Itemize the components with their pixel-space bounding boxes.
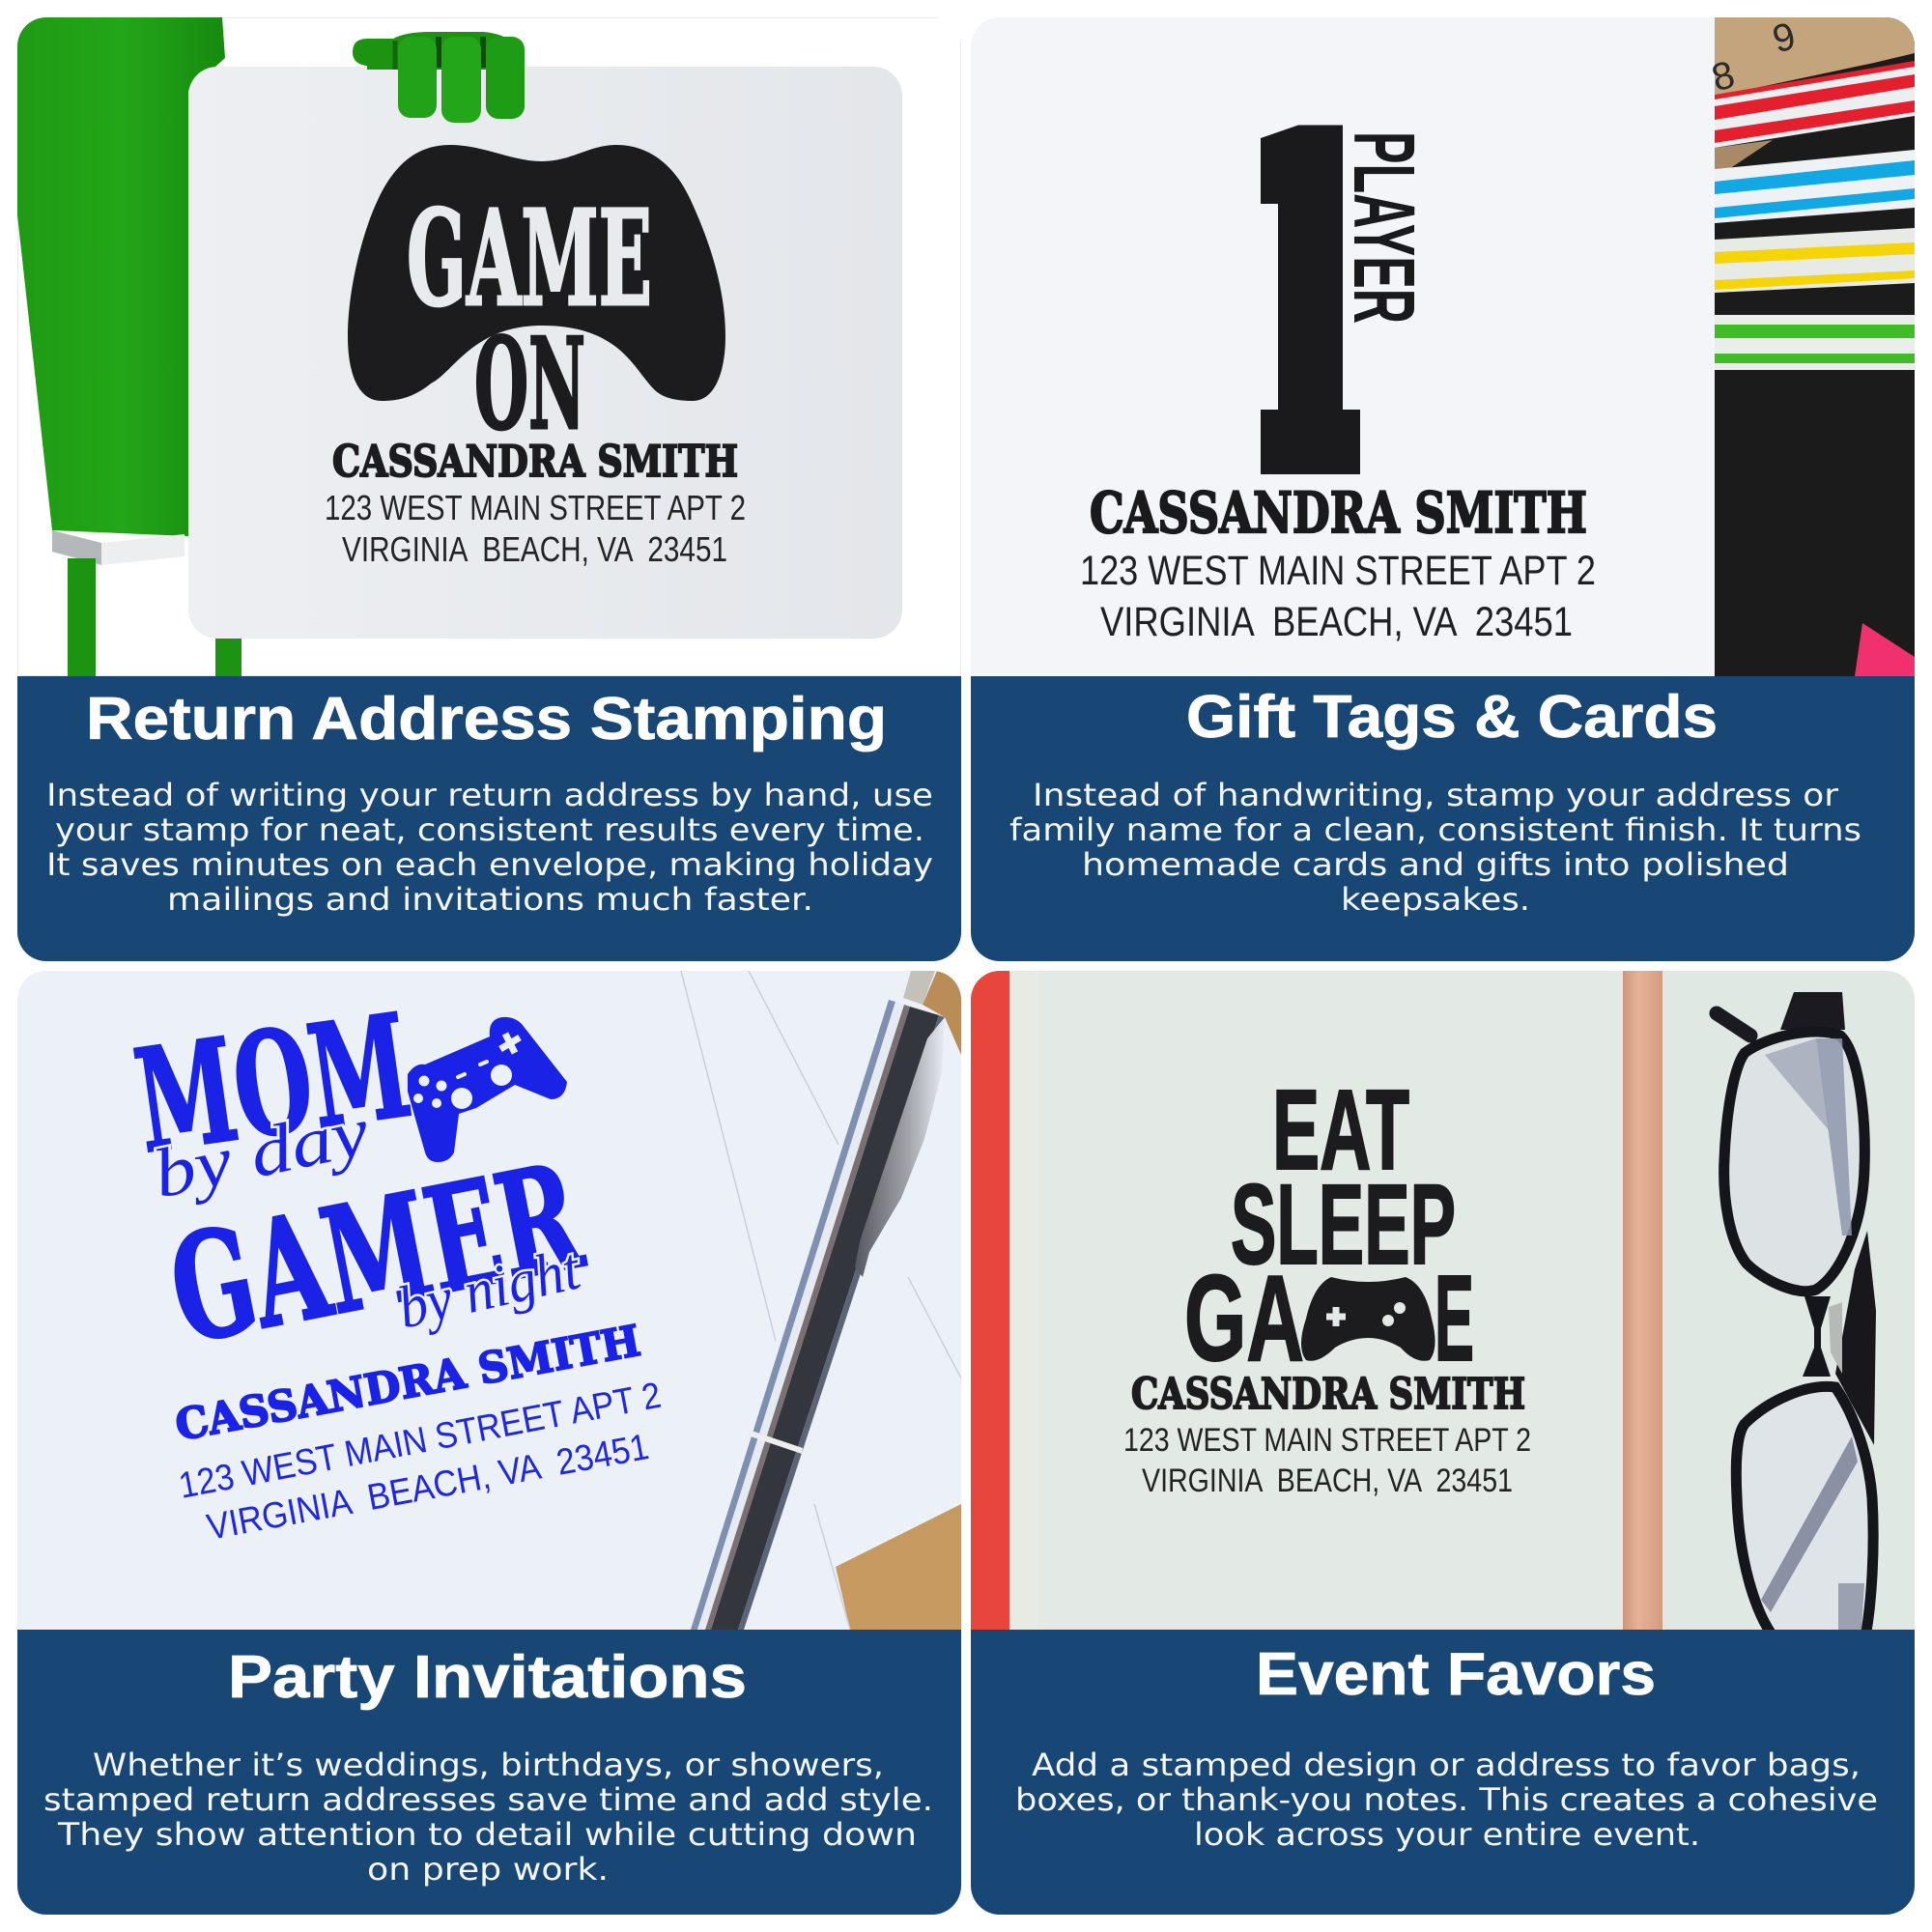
by day script: by day — [147, 1093, 375, 1213]
body text: Whether it’s weddings, birthdays, or showers, — [93, 1747, 884, 1783]
heading: Gift Tags & Cards — [1186, 684, 1718, 751]
body text — [46, 777, 933, 918]
number one graphic — [1261, 126, 1360, 474]
panel: party invitations — [17, 971, 961, 1915]
desk strip with ruler and tapes: 8 — [1707, 53, 1739, 99]
SLEEP text: SLEEP — [1231, 1161, 1456, 1289]
body text: stamped return addresses save time and add style. — [43, 1781, 933, 1818]
name: CASSANDRA SMITH — [1131, 1370, 1525, 1419]
game pad icon — [408, 1017, 567, 1162]
body text: homemade cards and gifts into polished — [1082, 846, 1789, 883]
body text: your stamp for neat, consistent results every time. — [55, 811, 924, 848]
body text: boxes, or thank-you notes. This creates a cohesive — [1015, 1781, 1878, 1818]
address line 2: VIRGINIA BEACH, VA 23451 — [1100, 599, 1573, 645]
GA letters: GA — [1184, 1250, 1304, 1386]
panel: event favors — [971, 971, 1915, 1915]
body text: family name for a clean, consistent finish. It turns — [1009, 811, 1861, 848]
body text: look across your entire event. — [1194, 1816, 1700, 1853]
panel: gift tags and cards — [971, 14, 1915, 961]
address line 2: VIRGINIA BEACH, VA 23451 — [342, 529, 727, 569]
green hand — [353, 32, 525, 123]
photo: stamped notebook with pencil and glasses: E — [1435, 1250, 1474, 1386]
EAT text: EAT — [1272, 1066, 1409, 1194]
game controller stamp graphic — [348, 145, 725, 401]
body text — [1009, 777, 1861, 918]
green figure body — [17, 17, 242, 676]
body text: Add a stamped design or address to favor bags, — [1032, 1747, 1861, 1783]
pen — [691, 971, 945, 1630]
glasses — [1717, 992, 1876, 1642]
pencil — [1623, 971, 1662, 1630]
panel: return address stamping — [17, 17, 961, 961]
body text: It saves minutes on each envelope, making holiday — [46, 846, 933, 883]
body text: mailings and invitations much faster. — [167, 881, 813, 918]
name: CASSANDRA SMITH — [1090, 480, 1587, 546]
photo: green figure holding stamped card: ON — [474, 310, 585, 458]
address line 2: VIRGINIA BEACH, VA 23451 — [204, 1427, 652, 1548]
body text — [1015, 1747, 1878, 1853]
desk strip with ruler and tapes — [1707, 14, 1915, 676]
red notebook edge — [971, 971, 1009, 1630]
PLAYER vertical text: PLAYER — [1335, 131, 1432, 324]
body text — [43, 1747, 933, 1888]
by night script: by night — [392, 1236, 587, 1342]
heading: Party Invitations — [228, 1644, 747, 1711]
address line 2: VIRGINIA BEACH, VA 23451 — [1142, 1463, 1513, 1499]
photo: blue stamped envelope with pen — [17, 971, 961, 1630]
address line 1: 123 WEST MAIN STREET APT 2 — [1123, 1422, 1531, 1459]
MOM text: MOM — [127, 983, 419, 1185]
GAME text: GAME — [407, 182, 652, 336]
body text: Instead of handwriting, stamp your address or — [1033, 777, 1839, 813]
body text: They show attention to detail while cutting down — [57, 1816, 917, 1853]
heading: Return Address Stamping — [86, 686, 887, 753]
GAMER text: GAMER — [157, 1131, 594, 1377]
address line 1: 123 WEST MAIN STREET APT 2 — [325, 488, 746, 527]
body text: on prep work. — [367, 1851, 609, 1888]
address line 1: 123 WEST MAIN STREET APT 2 — [1080, 548, 1596, 594]
body text: Instead of writing your return address by hand, use — [46, 777, 933, 813]
stamped card — [188, 67, 902, 639]
caption banner — [17, 676, 961, 961]
desk strip with ruler and tapes: 9 — [1768, 14, 1800, 61]
photo: green figure holding stamped card — [17, 17, 961, 676]
caption banner — [17, 1630, 961, 1915]
wood desk and paper sheets — [681, 971, 961, 1630]
photo: stamped card with striped tapes — [971, 14, 1915, 676]
photo: stamped notebook with pencil and glasses — [971, 971, 1915, 1642]
name: CASSANDRA SMITH — [172, 1317, 644, 1451]
caption banner — [971, 1630, 1915, 1915]
body text: keepsakes. — [1341, 881, 1530, 918]
heading: Event Favors — [1256, 1641, 1656, 1708]
caption banner — [971, 676, 1915, 961]
pen clip — [855, 1017, 945, 1277]
address line 1: 123 WEST MAIN STREET APT 2 — [176, 1376, 665, 1507]
name: CASSANDRA SMITH — [332, 436, 738, 487]
controller icon — [1301, 1277, 1435, 1361]
